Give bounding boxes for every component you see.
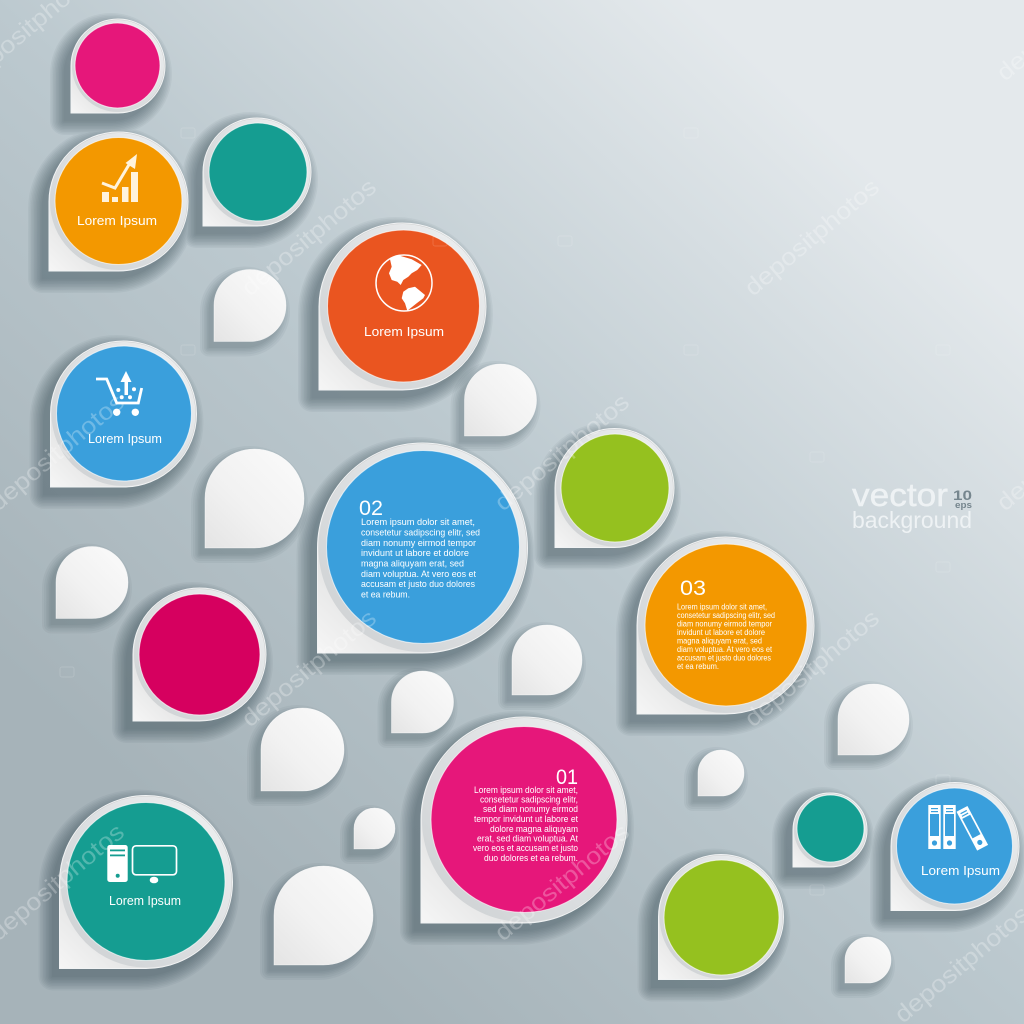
body text: invidunt ut labore et dolore bbox=[677, 628, 766, 637]
body text: magna aliquyam erat, sed bbox=[677, 636, 762, 646]
body text: consetetur sadipscing elitr, sed bbox=[361, 528, 480, 538]
orange circle with growth chart bbox=[49, 132, 188, 271]
watermark: depositphotos bbox=[237, 605, 382, 733]
label: Lorem Ipsum bbox=[77, 213, 157, 228]
body text: Lorem ipsum dolor sit amet, bbox=[474, 785, 578, 795]
label: Lorem Ipsum bbox=[921, 863, 1000, 878]
watermark: depositphotos bbox=[740, 605, 885, 733]
label: Lorem Ipsum bbox=[109, 893, 181, 908]
orange text circle 03 bbox=[637, 537, 814, 714]
body text: invidunt ut labore et dolore bbox=[361, 548, 469, 559]
blue circle with binders bbox=[891, 782, 1019, 910]
watermark: depositphotos bbox=[490, 819, 635, 947]
body text: diam nonumy eirmod tempor bbox=[361, 538, 476, 549]
magenta circle bbox=[71, 19, 165, 113]
blue text circle 02 bbox=[318, 443, 528, 653]
body text: consetetur sadipscing elitr, bbox=[480, 794, 578, 804]
body text: magna aliquyam erat, sed bbox=[361, 558, 464, 570]
icon: shopping cart bbox=[96, 371, 142, 416]
watermark: depositphotos bbox=[237, 174, 382, 302]
body text bbox=[677, 602, 775, 671]
icon: desktop computer bbox=[107, 845, 176, 883]
body text: tempor invidunt ut labore et bbox=[474, 814, 578, 824]
watermark: depositphotos bbox=[490, 389, 635, 517]
body text: sed diam nonumy eirmod bbox=[483, 804, 578, 814]
watermark: depositphotos bbox=[740, 174, 885, 302]
vector background badge: eps bbox=[955, 500, 972, 510]
body text bbox=[473, 785, 578, 863]
label: Lorem Ipsum bbox=[364, 324, 444, 339]
body text: vero eos et accusam et justo bbox=[473, 843, 578, 853]
vector background badge: background bbox=[852, 507, 972, 533]
body text: erat, sed diam voluptua. At bbox=[477, 834, 578, 844]
vector background badge: vector bbox=[852, 477, 948, 513]
icon: growth chart bbox=[102, 154, 138, 202]
icon: binders bbox=[928, 805, 988, 851]
body text: et ea rebum. bbox=[361, 590, 410, 600]
number: 02 bbox=[359, 497, 383, 520]
green circle lower bbox=[658, 855, 784, 980]
small teal circle bbox=[793, 793, 867, 867]
blue circle with shopping cart bbox=[50, 341, 196, 487]
crimson circle bbox=[133, 588, 266, 721]
icon: globe bbox=[376, 255, 432, 311]
body text: accusam et justo duo dolores bbox=[677, 654, 771, 662]
vector background badge: 10 bbox=[953, 487, 972, 503]
body text: duo dolores et ea rebum. bbox=[484, 853, 578, 863]
body text: diam voluptua. At vero eos et bbox=[677, 645, 773, 654]
green circle bbox=[555, 429, 674, 548]
label: Lorem Ipsum bbox=[88, 431, 162, 446]
body text: consetetur sadipscing elitr, sed bbox=[677, 611, 775, 620]
teal circle bbox=[203, 118, 311, 226]
body text: et ea rebum. bbox=[677, 662, 719, 671]
body text: accusam et justo duo dolores bbox=[361, 579, 475, 590]
body text bbox=[361, 517, 480, 600]
body text: Lorem ipsum dolor sit amet, bbox=[361, 517, 475, 528]
body text: diam nonumy eirmod tempor bbox=[677, 620, 772, 628]
number: 01 bbox=[556, 766, 578, 789]
number: 03 bbox=[680, 577, 706, 600]
body text: Lorem ipsum dolor sit amet, bbox=[677, 602, 767, 612]
red-orange circle with globe bbox=[319, 223, 486, 390]
white teardrop markers bbox=[56, 270, 909, 983]
vector background badge bbox=[852, 477, 972, 533]
body text: diam voluptua. At vero eos et bbox=[361, 569, 476, 580]
teal circle with computer bbox=[60, 795, 232, 968]
body text: dolore magna aliquyam bbox=[490, 824, 578, 834]
pink text circle 01 bbox=[421, 717, 627, 923]
